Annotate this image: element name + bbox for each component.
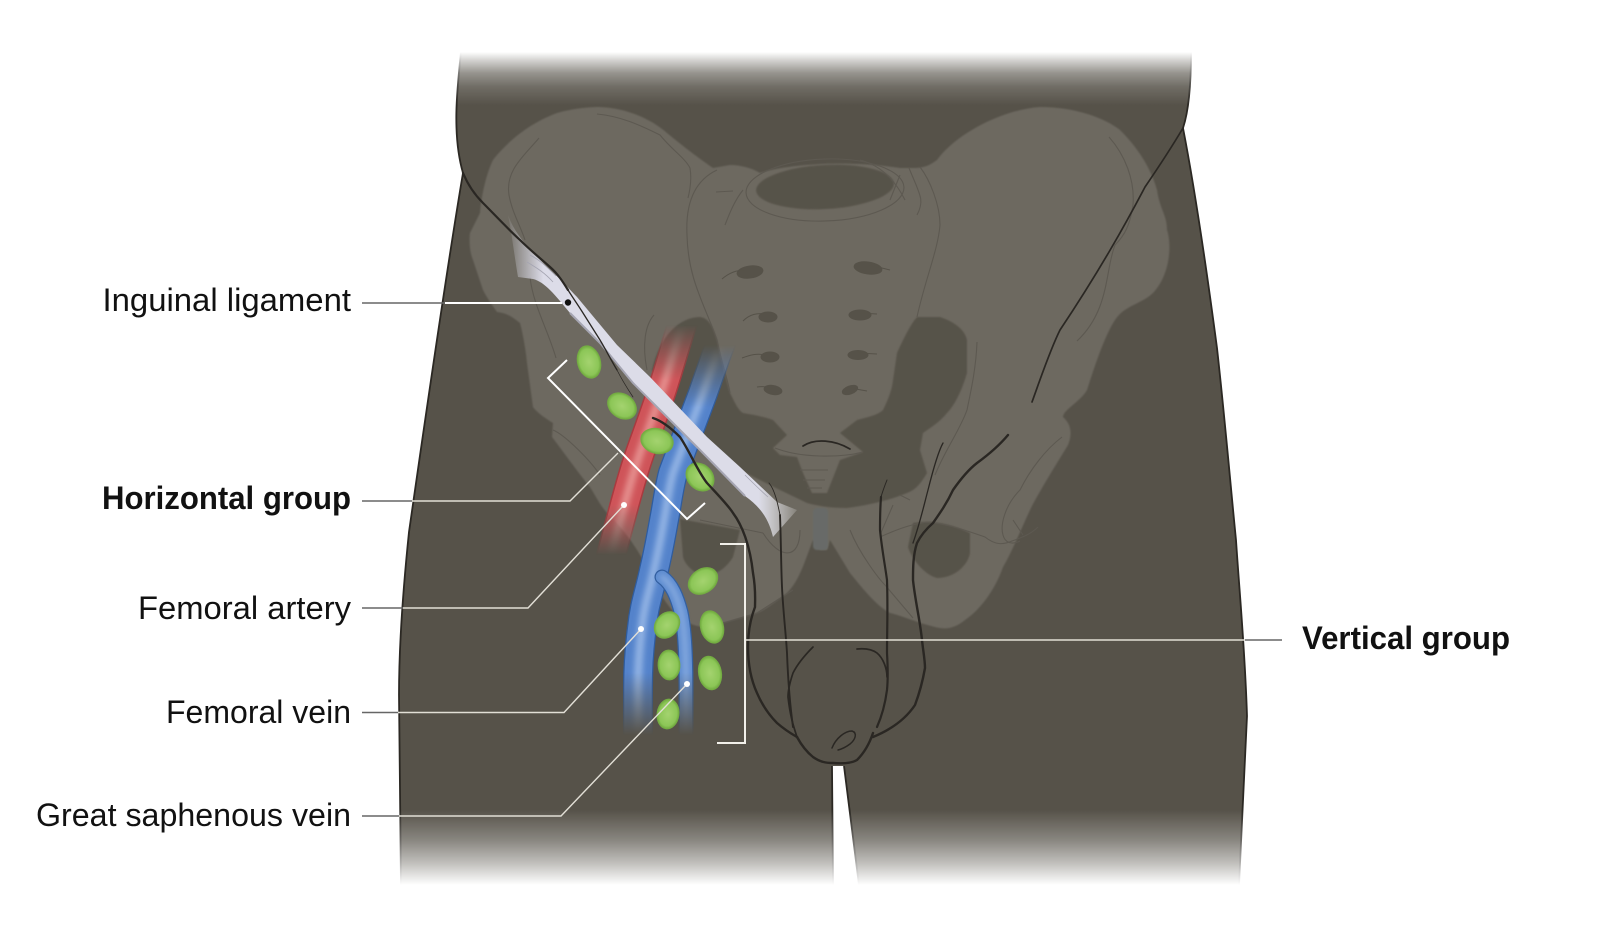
obturator foramen left	[680, 519, 740, 575]
label: horizontal group: Horizontal group	[102, 480, 351, 516]
body contour lines	[463, 128, 1183, 763]
leader: great saphenous vein	[362, 681, 690, 816]
great saphenous vein	[662, 577, 686, 745]
femoral artery	[610, 315, 685, 560]
leader lines	[362, 299, 1282, 816]
label: femoral artery: Femoral artery	[138, 590, 351, 626]
pelvis bone	[470, 107, 1169, 628]
lymph nodes: horizontal group	[574, 343, 720, 497]
label: inguinal ligament: Inguinal ligament	[102, 282, 351, 318]
pelvic inlet	[756, 164, 894, 210]
pubic symphysis	[812, 540, 828, 550]
pelvic cavity	[652, 317, 967, 508]
torso and legs	[399, 52, 1247, 885]
leader: horizontal group	[362, 453, 618, 501]
body silhouette with pelvis	[399, 52, 1247, 885]
bracket: vertical group	[717, 544, 745, 743]
leader: femoral artery	[362, 502, 627, 608]
lymph nodes: vertical group	[649, 562, 727, 730]
label: femoral vein: Femoral vein	[166, 694, 351, 730]
faint bone contour lines	[508, 114, 1133, 623]
bracket: horizontal group	[548, 360, 705, 519]
sacral foramina	[722, 260, 890, 396]
body outline	[399, 52, 1247, 885]
inguinal ligament	[508, 215, 797, 537]
leader: inguinal ligament	[362, 299, 571, 306]
leader: vertical group	[746, 639, 1282, 641]
obturator foramen right	[908, 522, 970, 578]
femoral vein	[638, 330, 726, 745]
label: vertical group: Vertical group	[1302, 620, 1510, 656]
leader: femoral vein	[362, 626, 644, 712]
label: great saphenous vein: Great saphenous vein	[36, 797, 351, 833]
